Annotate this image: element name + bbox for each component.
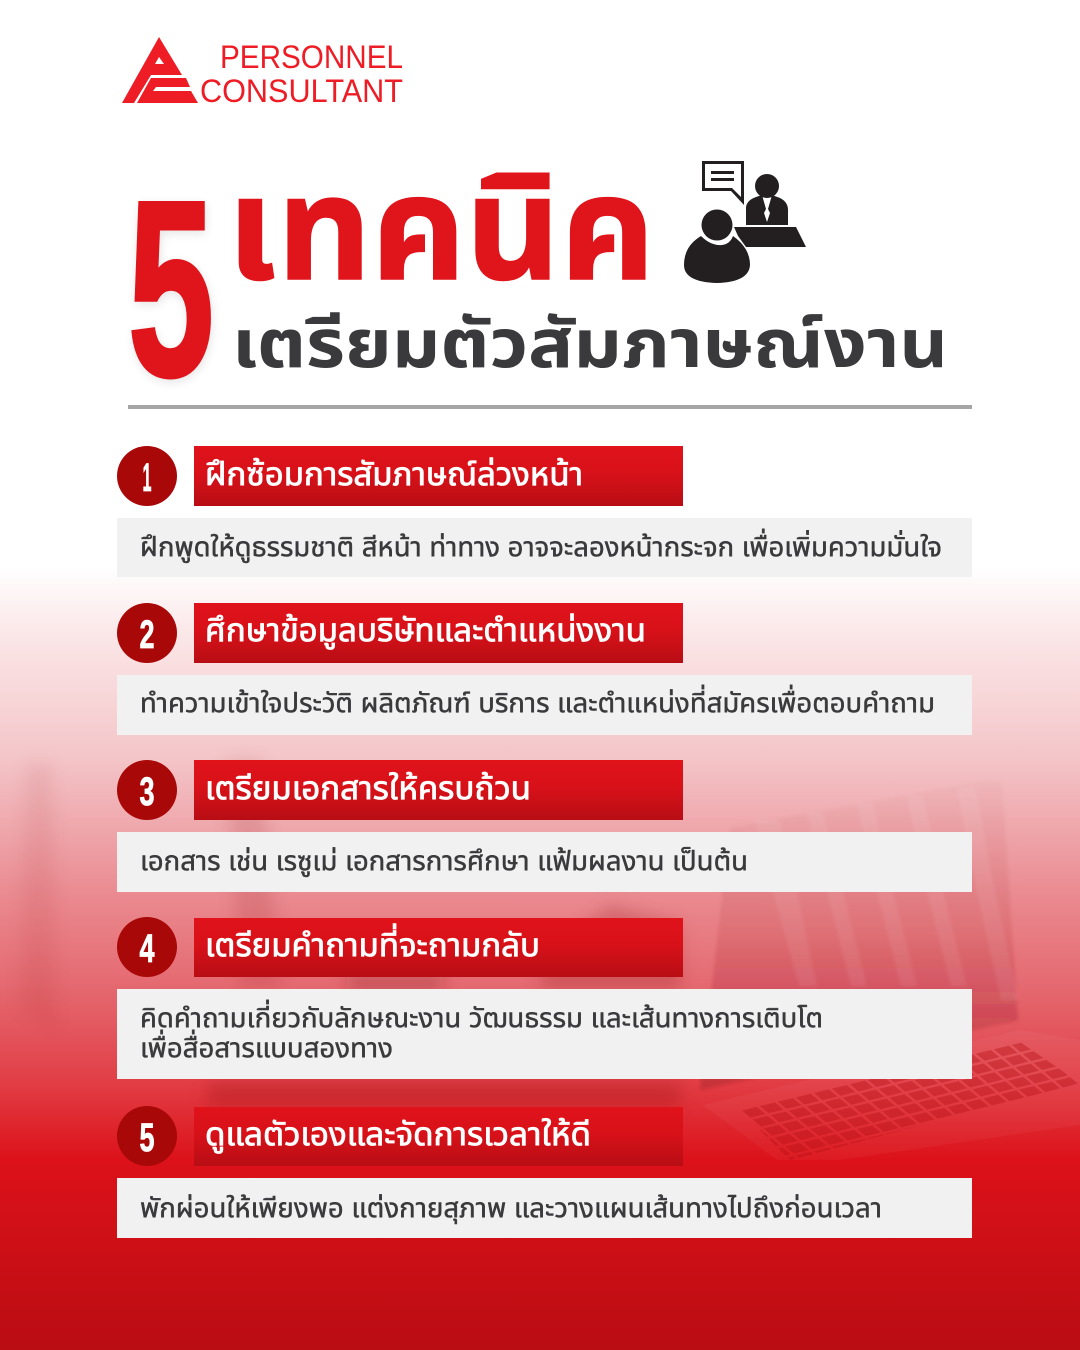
logo wordmark: PERSONNEL <box>220 39 403 75</box>
logo: Personnel Consultant <box>122 37 403 109</box>
laptop base <box>703 1030 1080 1160</box>
desk <box>734 227 806 247</box>
step 5 <box>117 1106 972 1238</box>
step 2: 2 <box>140 613 154 657</box>
number badge <box>117 1106 177 1166</box>
title block <box>128 148 948 431</box>
title line 2: เตรียมตัวสัมภาษณ์งาน <box>232 306 948 382</box>
candidate <box>702 210 732 240</box>
number badge <box>117 917 177 977</box>
step 1: 1 <box>142 456 152 500</box>
step 2: ศึกษาข้อมูลบริษัทและตำแหน่งงาน <box>205 612 646 650</box>
step 4 <box>117 917 972 1079</box>
heading bar <box>194 1107 683 1166</box>
step 5: พักผ่อนให้เพียงพอ แต่งกายสุภาพ และวางแผนเส้นทางไปถึงก่อนเวลา <box>140 1193 882 1224</box>
step 3 <box>117 760 972 892</box>
speech bubble <box>702 161 744 205</box>
logo mark <box>122 37 198 103</box>
heading bar <box>194 760 683 820</box>
heading bar <box>194 603 683 663</box>
step 3: 3 <box>140 770 154 814</box>
step 2 <box>117 603 972 735</box>
background photo: person and laptop <box>20 760 1080 1160</box>
step 4: เพื่อสื่อสารแบบสองทาง <box>140 1029 393 1063</box>
title line 1: เทคนิค <box>227 148 655 310</box>
step 3: เอกสาร เช่น เรซูเม่ เอกสารการศึกษา แฟ้มผลงาน เป็นต้น <box>140 846 748 877</box>
big numeral 5 shadow: 5 <box>129 152 215 431</box>
heading bar <box>194 446 683 506</box>
number badge <box>117 760 177 820</box>
step 1: ฝึกซ้อมการสัมภาษณ์ล่วงหน้า <box>205 456 583 492</box>
person shadows <box>20 760 680 1107</box>
step 3: เตรียมเอกสารให้ครบถ้วน <box>205 770 531 806</box>
interviewer <box>755 174 779 198</box>
step 4: คิดคำถามเกี่ยวกับลักษณะงาน วัฒนธรรม และเส้นทางการเติบโต <box>140 999 823 1033</box>
description panel <box>117 675 972 735</box>
icon: interview <box>684 161 806 283</box>
title divider <box>128 405 972 409</box>
step 5: 5 <box>140 1116 154 1160</box>
step 2: ทำความเข้าใจประวัติ ผลิตภัณฑ์ บริการ และตำแหน่งที่สมัครเพื่อตอบคำถาม <box>140 684 935 718</box>
description panel <box>117 518 972 577</box>
description panel <box>117 1178 972 1238</box>
step 1 <box>117 446 972 577</box>
step 5: ดูแลตัวเองและจัดการเวลาให้ดี <box>205 1116 591 1154</box>
logo: Personnel Consultant: CONSULTANT <box>200 73 403 109</box>
step 4: 4 <box>140 927 155 971</box>
laptop screen <box>700 780 1018 1090</box>
description panel <box>117 832 972 892</box>
big numeral 5: 5 <box>128 149 214 428</box>
number badge <box>117 446 177 506</box>
step 1: ฝึกพูดให้ดูธรรมชาติ สีหน้า ท่าทาง อาจจะลองหน้ากระจก เพื่อเพิ่มความมั่นใจ <box>140 528 942 563</box>
screen stripes <box>755 788 1019 1000</box>
description panel <box>117 989 972 1079</box>
number badge <box>117 603 177 663</box>
laptop keyboard <box>740 1042 1080 1160</box>
step 4: เตรียมคำถามที่จะถามกลับ <box>205 923 540 963</box>
heading bar <box>194 918 683 977</box>
